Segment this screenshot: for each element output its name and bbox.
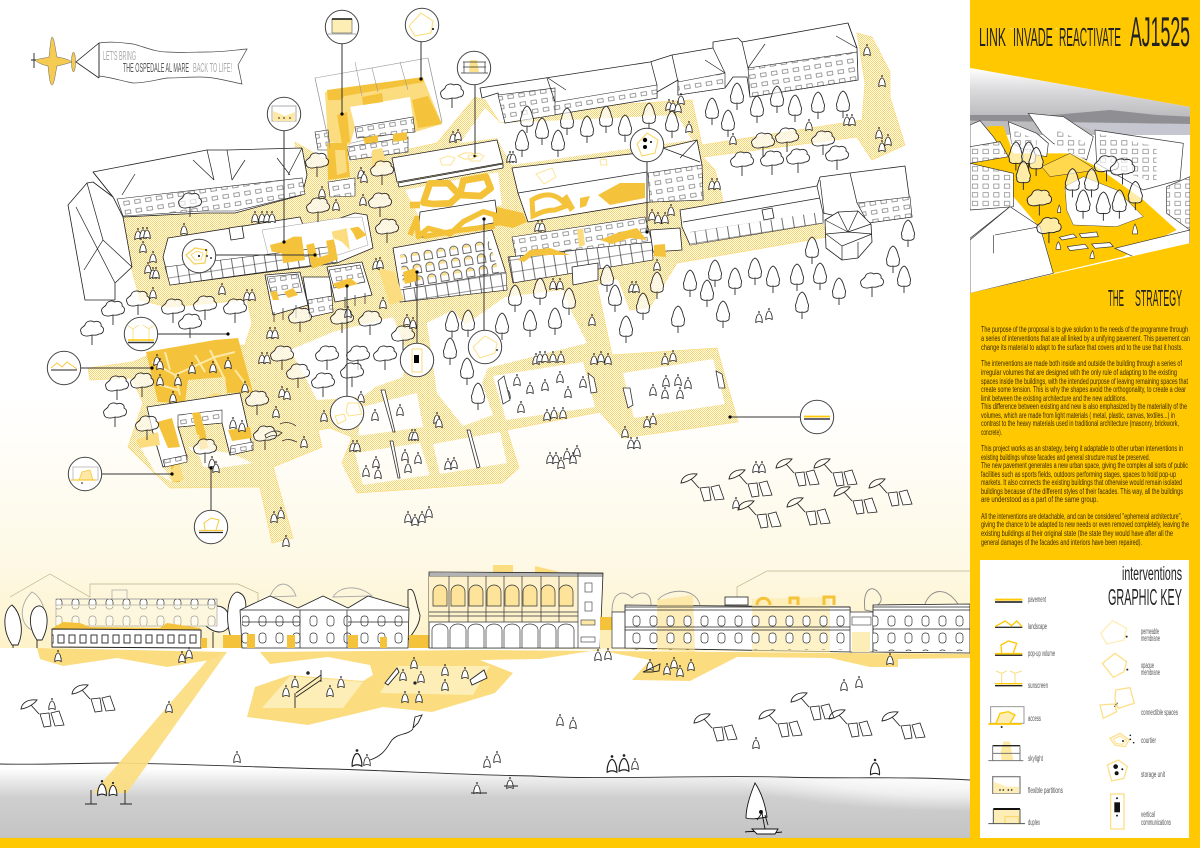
- building: row two with yellow roofs: [512, 140, 703, 222]
- plane with banner: THE OSPEDALE AL MARE: [123, 60, 189, 75]
- callout: access: [68, 457, 174, 491]
- section: people: [49, 647, 893, 804]
- panel title: INVADE: [1013, 22, 1053, 52]
- callout: landscape: [47, 351, 154, 385]
- panel title: LINK: [979, 22, 1006, 52]
- section: ghost outlines: [10, 571, 970, 618]
- key labels: duplex: [1028, 818, 1040, 827]
- callout: pop-up volume: [194, 466, 228, 544]
- key labels: skylight: [1028, 754, 1043, 763]
- side panel background: [970, 0, 1200, 848]
- building: west block on plan with yellow: [163, 213, 373, 285]
- key labels: membrane: [1141, 668, 1160, 677]
- building: north row: [480, 23, 858, 123]
- key labels: flexible partitions: [1028, 786, 1063, 795]
- site plan trees: [81, 83, 915, 463]
- panel title: +: [1055, 27, 1059, 33]
- key labels: communications: [1141, 818, 1171, 827]
- key labels: vertical: [1141, 810, 1155, 819]
- key labels: access: [1028, 714, 1041, 723]
- windsurfer: [745, 783, 782, 834]
- key labels: membrane: [1141, 634, 1160, 643]
- strategy text: are understood as a part of the same group.: [981, 495, 1098, 504]
- section: building two: [240, 596, 429, 648]
- plane with banner: [31, 37, 247, 85]
- key labels: pavement: [1028, 595, 1046, 604]
- beach umbrellas on plan: [681, 459, 912, 528]
- building: east long block and pavilion: [680, 166, 912, 260]
- building: small blocks on plan: [265, 262, 372, 322]
- callout: duplex: [325, 10, 359, 116]
- plane with banner: BACK TO LIFE!: [193, 60, 232, 75]
- plane with banner: LET'S BRING: [103, 48, 136, 63]
- section: shoreline and sea: [0, 739, 1190, 838]
- callout: connectible spaces: [330, 284, 364, 430]
- panel title: [979, 8, 1190, 55]
- key labels: sunscreen: [1028, 681, 1048, 690]
- building: central flat roofs with yellow membranes: [392, 140, 527, 238]
- key labels: opaque: [1141, 661, 1154, 670]
- bottom yellow bar: [0, 838, 970, 848]
- key labels: [1028, 595, 1178, 827]
- panel title: +: [1010, 27, 1014, 33]
- building: arcaded block: [378, 230, 507, 305]
- callout: opaque membrane: [468, 217, 502, 364]
- building: west wing and long block: [68, 148, 307, 300]
- section: umbrellas: [21, 685, 925, 741]
- callout: sunscreen: [124, 317, 230, 351]
- callout: skylight: [457, 51, 491, 159]
- section: trees: [5, 584, 958, 648]
- strategy text: concrete).: [981, 428, 1002, 437]
- heading: the strategy: [1108, 285, 1182, 311]
- key labels: courtier: [1141, 736, 1156, 745]
- section: volleyball net, kite and play items: [295, 664, 660, 760]
- building: courtyard with yellow interventions: [315, 58, 442, 197]
- strategy text: limit between the existing architecture and the new additions.: [981, 394, 1127, 403]
- section: yellow ground patches: [37, 648, 970, 793]
- callout: permeable membrane: [405, 8, 439, 81]
- heading: the strategy: THE: [1108, 285, 1124, 311]
- callout: flexible partitions: [267, 97, 301, 244]
- callout: storage unit: [630, 128, 664, 234]
- building: row four with yellow floors: [508, 217, 682, 285]
- perspective image: [970, 60, 1195, 300]
- key labels: pop-up volume: [1028, 649, 1055, 658]
- section: ground: [0, 648, 970, 838]
- key heading: [1108, 564, 1182, 610]
- key icons: [988, 600, 1134, 829]
- strategy text: [981, 325, 1190, 547]
- key labels: storage unit: [1141, 770, 1165, 779]
- section: arcaded building: [429, 565, 612, 648]
- panel: graphic key: [980, 560, 1189, 838]
- key labels: landscape: [1028, 622, 1047, 631]
- callout: pavement: [728, 400, 834, 434]
- site plan: hatched pavement network: [88, 33, 905, 543]
- callout: courtyard: [182, 239, 317, 273]
- section: building one: [52, 590, 257, 648]
- key labels: permeable: [1141, 627, 1159, 636]
- partition walls and pop-up screens in the enclosures: [265, 371, 725, 478]
- section: east buildings: [612, 595, 970, 653]
- site plan people: [135, 44, 891, 546]
- building: lower block solid yellow intervention: [136, 338, 253, 482]
- callout: vertical communications: [400, 270, 434, 377]
